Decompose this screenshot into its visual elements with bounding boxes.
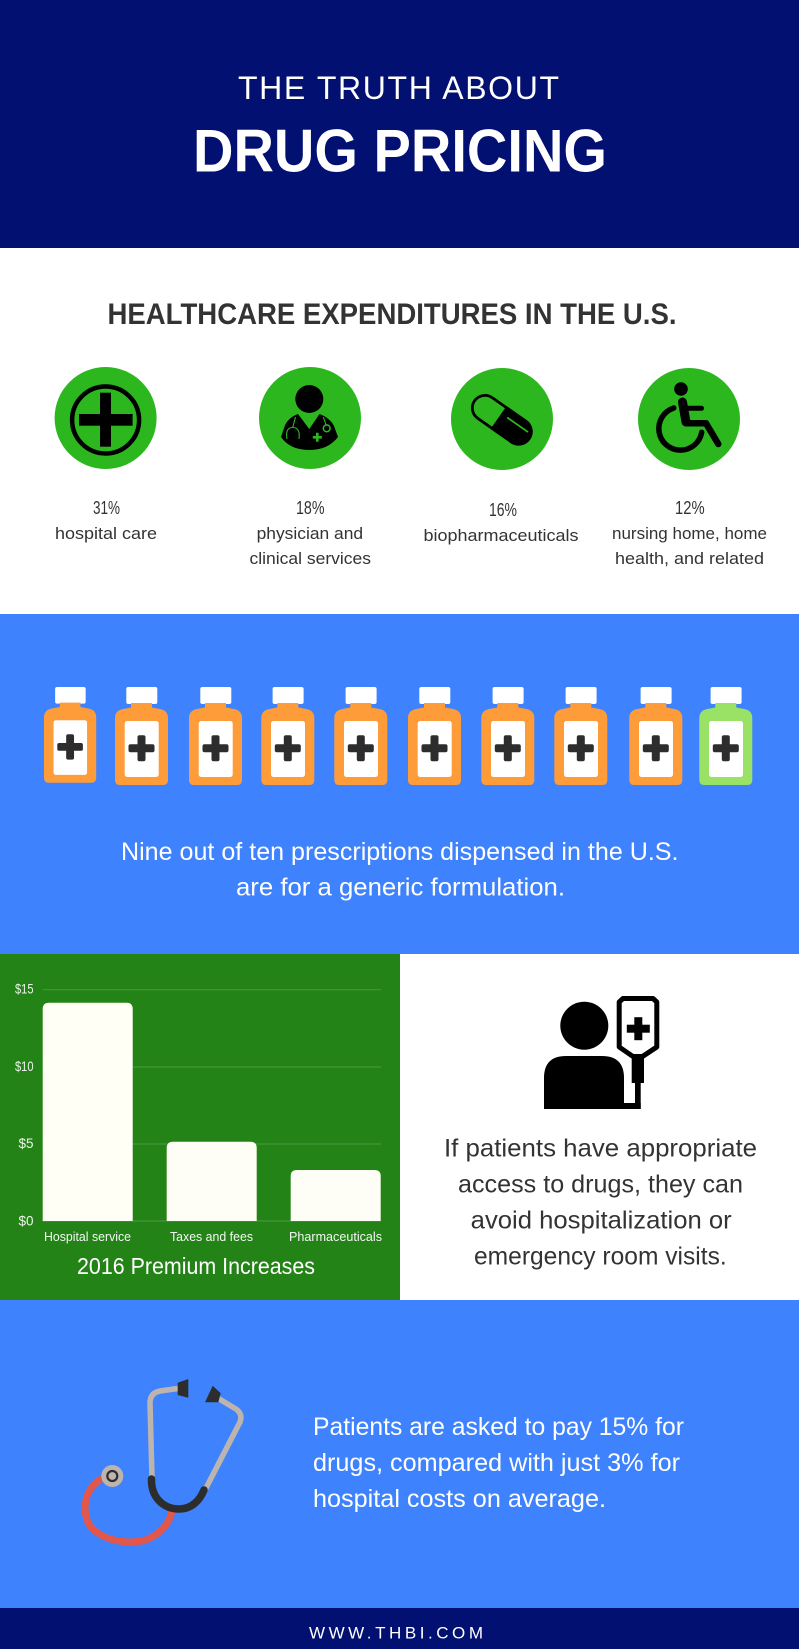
x axis labels xyxy=(44,1229,382,1244)
icon: orange bottle 9 xyxy=(629,687,682,785)
stat: 31%: 31% xyxy=(93,498,120,518)
text: patients pay 15% vs 3%: drugs, compared with just 3% for xyxy=(313,1449,680,1477)
text: patient access to drugs: emergency room visits. xyxy=(474,1242,727,1270)
icon: orange bottle 8 xyxy=(554,687,607,785)
item: biopharmaceuticals xyxy=(424,368,578,545)
text: patients pay 15% vs 3%: Patients are asked to pay 15% for xyxy=(313,1413,684,1441)
panel: generic prescriptions xyxy=(0,614,799,954)
icon: orange bottle 7 xyxy=(481,687,534,785)
label: physician and clinical services: physician and xyxy=(257,524,363,543)
icon: orange bottle 1 xyxy=(44,687,96,783)
stat: 16%: 16% xyxy=(489,500,517,520)
x axis labels: Pharmaceuticals xyxy=(289,1229,382,1244)
item: hospital care xyxy=(55,367,157,543)
section heading: HEALTHCARE EXPENDITURES IN THE U.S. xyxy=(108,298,676,331)
y axis labels xyxy=(15,980,34,1228)
bar: pharmaceuticals xyxy=(291,1170,381,1221)
label: biopharmaceuticals: biopharmaceuticals xyxy=(424,526,578,545)
text: patient access to drugs: If patients have appropriate xyxy=(444,1135,757,1163)
y axis labels: $5 xyxy=(18,1135,34,1151)
x axis labels: Hospital service xyxy=(44,1229,131,1244)
panel: header xyxy=(0,0,799,248)
y axis labels: $10 xyxy=(15,1058,34,1074)
title line: the truth about: THE TRUTH ABOUT xyxy=(238,70,559,106)
chart title: 2016 Premium Increases xyxy=(77,1253,315,1279)
stat: 18%: 18% xyxy=(296,498,324,518)
bottle row: nine orange, one green xyxy=(44,687,752,785)
text: patient access to drugs: avoid hospitalization or xyxy=(471,1207,732,1235)
panel: patient costs xyxy=(0,1300,799,1608)
label: hospital care: hospital care xyxy=(55,524,157,543)
icon: pill capsule xyxy=(451,368,553,470)
y axis labels: $15 xyxy=(15,980,34,996)
icon: doctor xyxy=(259,367,361,469)
icon: orange bottle 2 xyxy=(115,687,168,785)
text: patients pay 15% vs 3%: hospital costs on average. xyxy=(313,1485,606,1513)
panel: premium increases chart xyxy=(0,954,400,1300)
icon: orange bottle 6 xyxy=(408,687,461,785)
label: nursing home, home health, and related: health, and related xyxy=(615,549,764,568)
label: nursing home, home health, and related: nursing home, home xyxy=(612,524,767,543)
icon: green bottle xyxy=(699,687,752,785)
icon: medical cross in circle xyxy=(55,367,157,469)
icon: orange bottle 5 xyxy=(334,687,387,785)
text: nine out of ten prescriptions: are for a generic formulation. xyxy=(236,874,565,902)
text: nine out of ten prescriptions: Nine out of ten prescriptions dispensed in the U.S. xyxy=(121,838,678,866)
text: patient access to drugs: access to drugs, they can xyxy=(458,1171,743,1199)
icon: patient with iv bag xyxy=(544,998,657,1109)
footer url: WWW.THBI.COM xyxy=(309,1624,483,1643)
label: physician and clinical services: clinical services xyxy=(250,549,371,568)
panel: patient access xyxy=(400,954,799,1300)
panel: healthcare expenditures xyxy=(0,248,799,614)
item: physician and clinical services xyxy=(250,367,371,568)
stat: 12%: 12% xyxy=(675,498,705,518)
title line: drug pricing: DRUG PRICING xyxy=(193,118,607,185)
panel: footer xyxy=(0,1608,799,1649)
icon: wheelchair xyxy=(638,368,740,470)
chart grid lines xyxy=(43,990,381,1221)
icon: orange bottle 3 xyxy=(189,687,242,785)
x axis labels: Taxes and fees xyxy=(170,1229,253,1244)
bar: taxes and fees xyxy=(167,1142,257,1221)
item: nursing home, home health, and related xyxy=(612,368,767,568)
bar: hospital service xyxy=(43,1003,133,1221)
icon: orange bottle 4 xyxy=(261,687,314,785)
icon: stethoscope xyxy=(85,1379,241,1542)
y axis labels: $0 xyxy=(18,1212,34,1228)
